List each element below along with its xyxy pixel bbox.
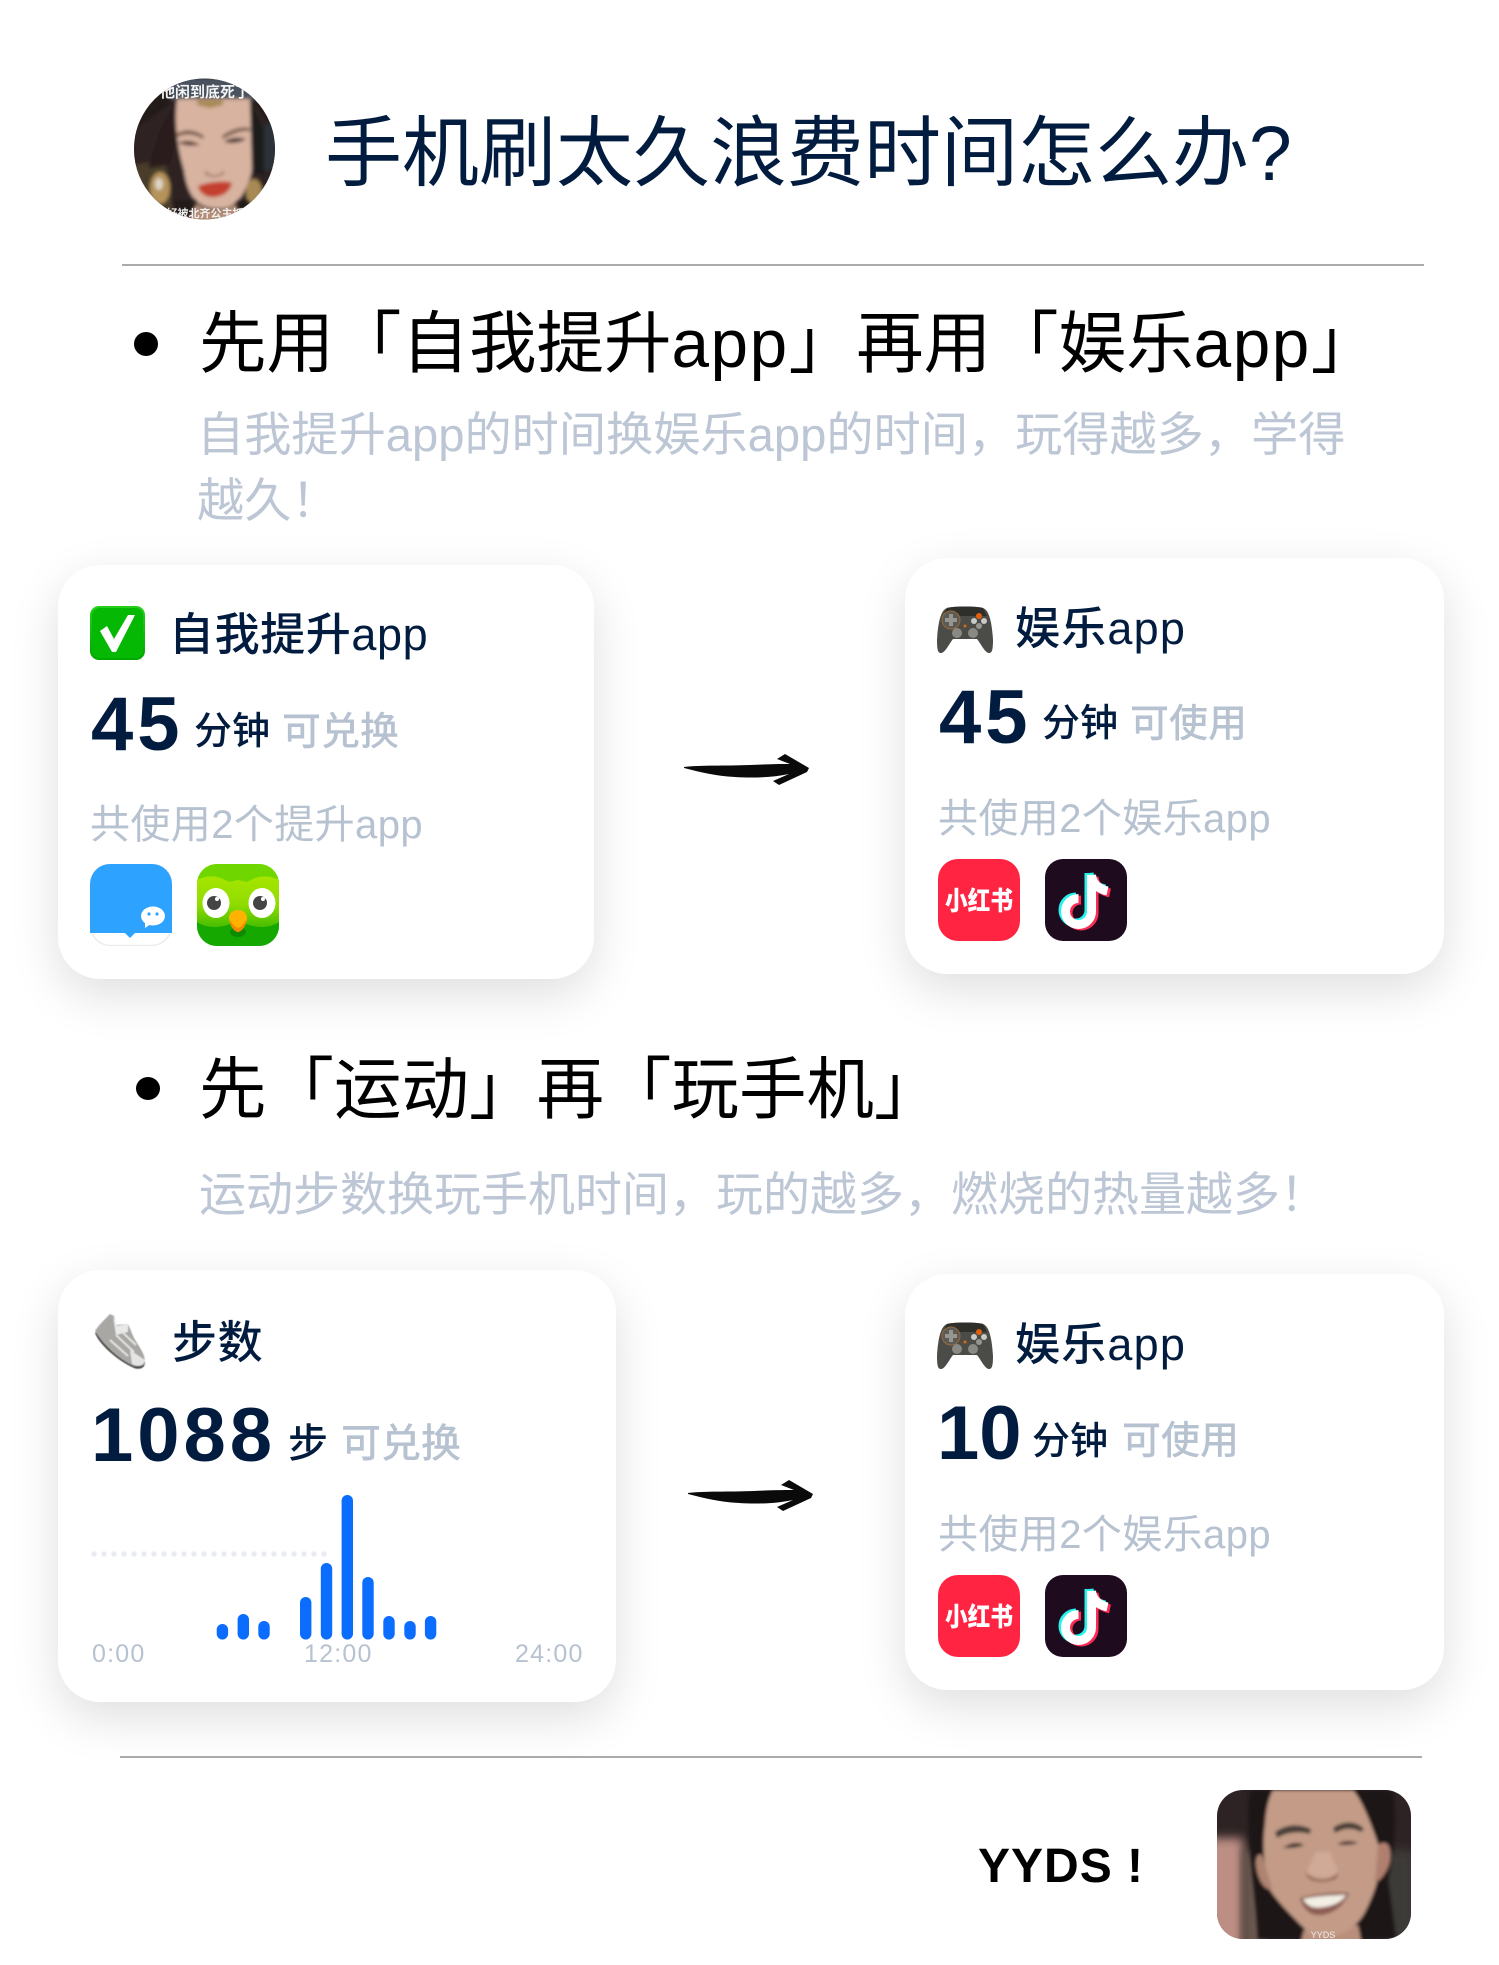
bullet heading: section 1: 先用「自我提升app」再用「娱乐app」: [199, 307, 1378, 382]
section 2 description: 运动步数换玩手机时间，玩的越多，燃烧的热量越多！: [199, 1168, 1327, 1221]
panel: steps card: [58, 1270, 616, 1702]
icon: tiktok: [1045, 859, 1127, 941]
icon: game controller: [937, 606, 993, 653]
panel: entertainment app card 2: [905, 1274, 1444, 1690]
section 1 description: 越久！: [197, 475, 339, 528]
use label: 可使用: [1122, 1420, 1239, 1463]
unit: 分钟: [1032, 1421, 1108, 1463]
icon: tiktok: [1045, 1575, 1127, 1657]
card title: 娱乐app: [1015, 603, 1186, 654]
icon: game controller: [937, 1322, 993, 1369]
avatar: crying woman: [134, 78, 275, 220]
stat: 45 minutes: 45: [91, 682, 184, 767]
arrow 1: [684, 754, 809, 785]
bullet dot 1: [134, 332, 158, 356]
icon: reading app: [90, 864, 172, 946]
icon: owl language app: [197, 864, 279, 946]
card title: 自我提升app: [169, 609, 428, 660]
photo: smiling man: [1217, 1790, 1411, 1939]
icon: sneaker: [94, 1314, 146, 1370]
stat: 45 minutes: 45: [939, 675, 1032, 760]
panel: self-improvement app card: [58, 565, 594, 979]
icon: xiaohongshu: [938, 859, 1020, 941]
bar chart: steps by hour: 0:00: [92, 1640, 145, 1668]
icon: green check: [90, 606, 145, 660]
icon: xiaohongshu: [938, 1575, 1020, 1657]
unit: 步: [288, 1422, 328, 1466]
closing text: YYDS !: [978, 1840, 1144, 1893]
section 1 description: [197, 409, 1345, 528]
use label: 可使用: [1130, 703, 1247, 746]
usage note: 共使用2个娱乐app: [938, 1513, 1271, 1557]
unit: 分钟: [1042, 703, 1118, 745]
usage note: 共使用2个娱乐app: [938, 797, 1271, 841]
usage note: 共使用2个提升app: [90, 803, 423, 847]
panel: entertainment app card 1: [905, 558, 1444, 974]
stat: 10 minutes: 10: [937, 1391, 1022, 1476]
bullet heading: section 2: 先「运动」再「玩手机」: [199, 1053, 942, 1128]
arrow 2: [688, 1480, 813, 1511]
bar chart: steps by hour: 12:00: [304, 1640, 373, 1668]
exchange label: 可兑换: [282, 711, 399, 754]
card title: 娱乐app: [1015, 1319, 1186, 1370]
section 1 description: 自我提升app的时间换娱乐app的时间，玩得越多，学得: [197, 409, 1345, 462]
card title: 步数: [172, 1317, 263, 1368]
avatar: crying woman: 好被北齐公主抓: [166, 206, 244, 220]
avatar: crying woman: 他闲到底死了: [160, 83, 250, 101]
exchange label: 可兑换: [341, 1422, 461, 1466]
bar chart: steps by hour: [91, 1495, 584, 1668]
stat: 1088 steps: 1088: [91, 1393, 276, 1478]
bar chart: steps by hour: 24:00: [515, 1640, 584, 1668]
bullet dot 2: [136, 1077, 160, 1100]
title: 手机刷太久浪费时间怎么办?: [325, 111, 1292, 197]
unit: 分钟: [194, 711, 270, 753]
